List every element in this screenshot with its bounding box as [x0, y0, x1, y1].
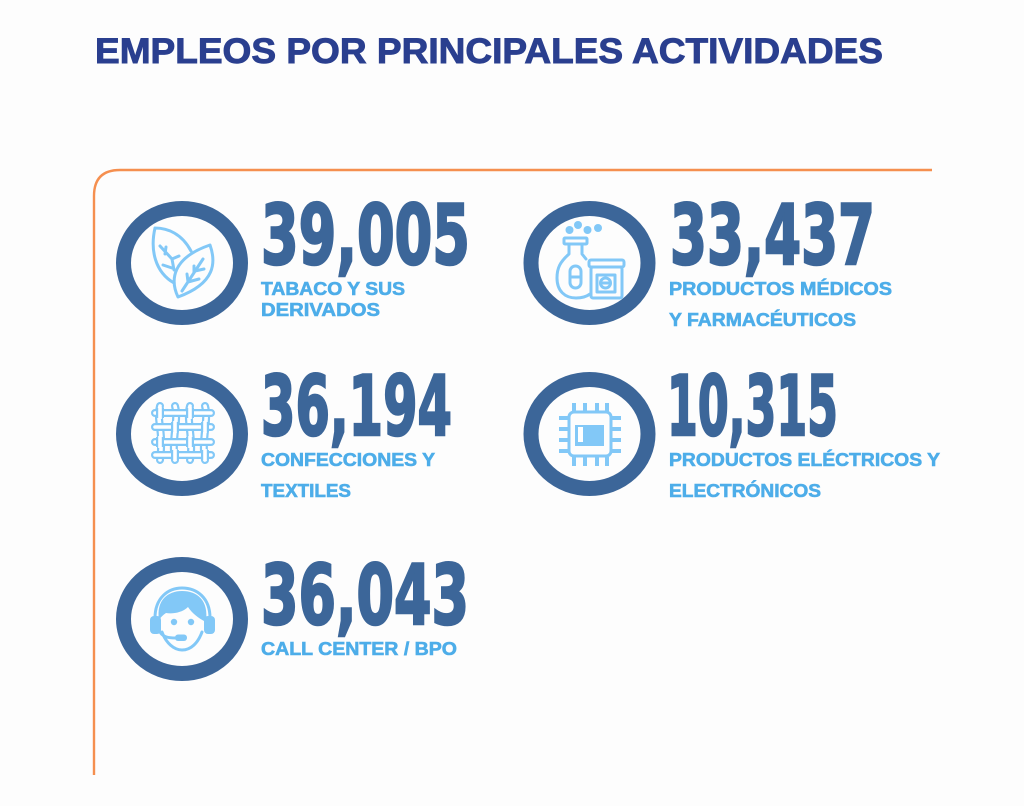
label: PRODUCTOS MÉDICOS — [669, 278, 892, 299]
label — [261, 450, 435, 501]
icon: tobacco leaves — [124, 208, 240, 318]
icon: headset agent — [124, 564, 240, 674]
label — [261, 279, 405, 320]
label: Y FARMACÉUTICOS — [669, 309, 856, 330]
item: productos médicos — [531, 187, 892, 330]
panel frame: orange border — [94, 170, 932, 775]
label: CONFECCIONES Y — [261, 450, 435, 470]
item: tabaco — [124, 187, 470, 320]
icon: microchip — [531, 380, 648, 488]
icon: flask and jar — [531, 208, 648, 318]
label: ELECTRÓNICOS — [669, 480, 821, 501]
item: productos eléctricos — [531, 358, 940, 501]
icon: woven fabric — [124, 380, 240, 488]
number: 36,194 — [261, 358, 452, 455]
number: 39,005 — [261, 187, 470, 284]
label: DERIVADOS — [261, 300, 380, 320]
label: PRODUCTOS ELÉCTRICOS Y — [669, 449, 940, 470]
item: call center — [124, 547, 469, 674]
label: TEXTILES — [261, 481, 351, 501]
number: 10,315 — [667, 358, 838, 455]
label: CALL CENTER / BPO — [261, 639, 457, 659]
title: EMPLEOS POR PRINCIPALES ACTIVIDADES — [95, 32, 883, 71]
item: confecciones — [124, 358, 452, 501]
label — [669, 278, 892, 330]
number: 33,437 — [670, 187, 875, 284]
label — [669, 449, 940, 501]
number: 36,043 — [261, 547, 469, 644]
label: TABACO Y SUS — [261, 279, 405, 299]
